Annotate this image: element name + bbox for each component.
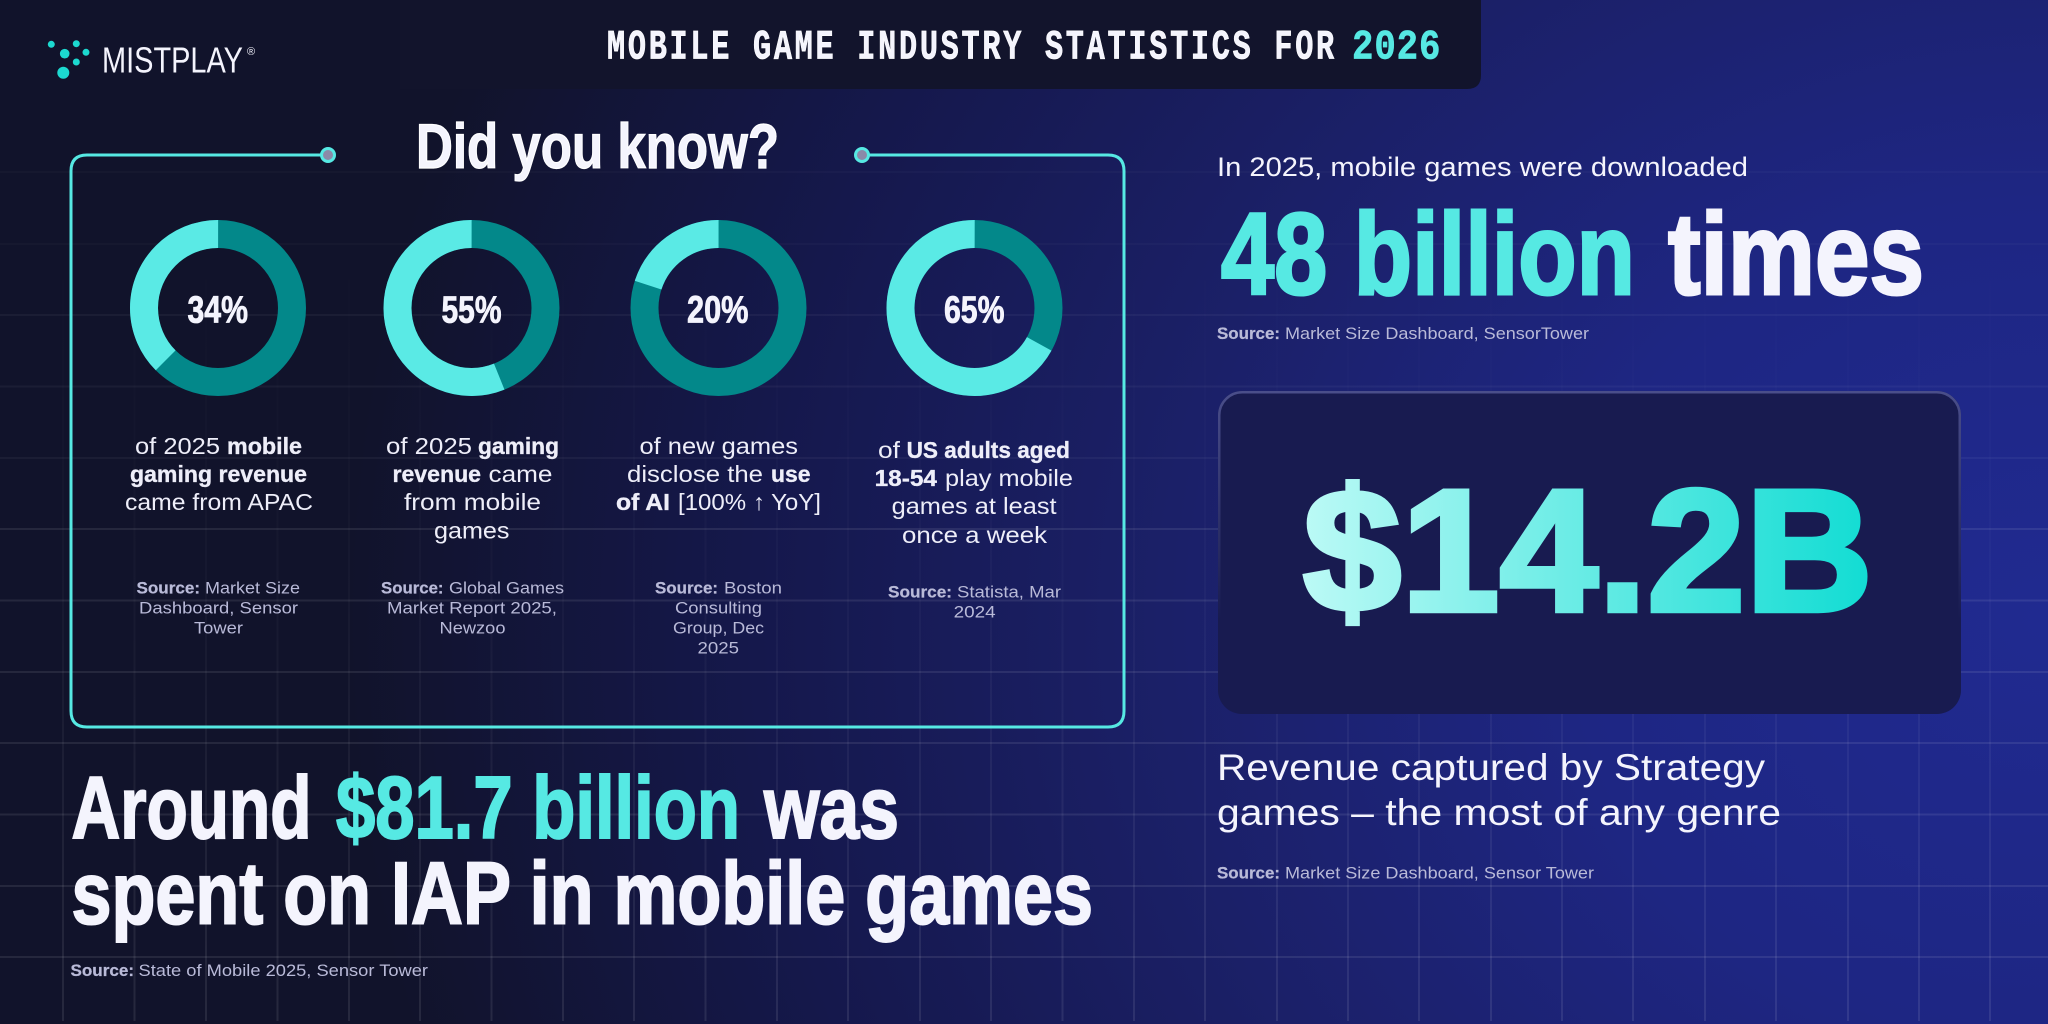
description: 20%: of AI <box>616 489 670 515</box>
stat column: 65% US adults <box>874 207 1075 622</box>
description: 20%: of new games <box>640 433 798 459</box>
donut chart: 55% <box>375 212 568 404</box>
description: 20%: [100% ↑ YoY] <box>678 489 821 515</box>
description: 65%: US adults aged <box>907 437 1070 463</box>
description: 65% <box>875 437 1073 548</box>
description: 34%: of 2025 <box>135 433 220 459</box>
stat column: 55% gaming revenue <box>375 212 568 638</box>
source: 55%: Market Report 2025, <box>387 600 557 618</box>
description: 55%: of 2025 <box>386 433 472 459</box>
source: 34%: Dashboard, Sensor <box>139 600 299 618</box>
text: strategy revenue caption: Revenue captured by Strategy <box>1217 747 1766 788</box>
source: 20%: Group, Dec <box>673 620 764 638</box>
source: 65%: Statista, Mar <box>957 584 1062 602</box>
source: 55%: Global Games <box>449 580 564 598</box>
description: 55%: from mobile <box>404 489 541 515</box>
title bar: 2026 <box>1352 24 1440 71</box>
donut chart: 65% <box>874 207 1075 409</box>
logo: Mistplay: MISTPLAY <box>102 39 243 80</box>
description: 55% <box>386 433 559 544</box>
logo: Mistplay: ® <box>247 46 255 58</box>
description: 65%: play mobile <box>945 465 1073 491</box>
text: strategy revenue caption: games – the most of any genre <box>1217 792 1781 833</box>
description: 34%: gaming revenue <box>130 461 307 487</box>
headline: $81.7 billion IAP spend <box>72 758 1093 943</box>
title text: MOBILE GAME INDUSTRY STATISTICS FOR <box>607 24 1334 71</box>
source: 34% <box>136 580 300 638</box>
source: downloads: Market Size Dashboard, SensorTower <box>1285 325 1590 343</box>
big number: $14.2B: $14.2B <box>1303 453 1873 648</box>
panel: $14.2B callout card <box>1218 391 1961 714</box>
donut chart: 65%: 65% <box>944 290 1004 332</box>
source: 65% <box>888 584 1062 622</box>
headline: $81.7 billion IAP spend: spent on IAP in mobile games <box>72 844 1093 943</box>
donut chart: 34% <box>113 203 323 413</box>
description: 20%: disclose the <box>627 461 763 487</box>
description: 55%: revenue <box>392 461 481 487</box>
source: 20%: Source: <box>655 580 718 598</box>
source: 34%: Market Size <box>205 580 300 598</box>
description: 34%: mobile <box>227 433 302 459</box>
source: 34%: Source: <box>136 580 200 598</box>
source: 55%: Newzoo <box>440 620 506 638</box>
source: strategy revenue: Market Size Dashboard, Sensor Tower <box>1285 865 1595 883</box>
headline: $81.7 billion IAP spend: was <box>763 758 899 857</box>
source: IAP spend: Source: <box>70 962 134 980</box>
donut chart: 34%: 34% <box>188 290 248 332</box>
description: 65%: games at least <box>892 493 1057 519</box>
stat column: 34% APAC revenue <box>113 203 323 638</box>
source: 20%: 2025 <box>698 640 739 658</box>
text: downloads intro: In 2025, mobile games were downloaded <box>1217 152 1748 182</box>
description: 34% <box>125 433 313 515</box>
source: 65%: Source: <box>888 584 952 602</box>
source: downloads: Source: <box>1217 325 1280 343</box>
stat column: 20% use of AI <box>616 215 821 658</box>
description: 20%: use <box>771 461 810 487</box>
description: 65%: of <box>878 437 901 463</box>
title bar <box>400 0 1481 89</box>
description: 55%: gaming <box>478 433 559 459</box>
headline: 48 billion times: times <box>1668 189 1924 319</box>
source: 20%: Boston <box>724 580 782 598</box>
headline: $81.7 billion IAP spend: Around <box>72 758 312 857</box>
source: IAP spend: State of Mobile 2025, Sensor Tower <box>138 962 429 980</box>
headline: 48 billion times: 48 billion <box>1221 189 1635 319</box>
source: 55%: Source: <box>381 580 444 598</box>
description: 20% <box>616 433 821 515</box>
description: 65%: 18-54 <box>875 465 937 491</box>
description: 65%: once a week <box>902 522 1048 548</box>
donut chart: 20% <box>625 215 812 401</box>
source: 55% <box>381 580 564 638</box>
donut chart: 55%: 55% <box>442 290 502 332</box>
description: 55%: came <box>488 461 552 487</box>
source: 20% <box>655 580 782 658</box>
text: strategy revenue caption <box>1217 747 1781 833</box>
source: 65%: 2024 <box>954 604 996 622</box>
panel: did you know frame <box>71 148 1124 727</box>
logo: Mistplay <box>48 39 255 80</box>
headline: $81.7 billion IAP spend: $81.7 billion <box>336 758 740 857</box>
description: 34%: came from APAC <box>125 489 313 515</box>
source: 20%: Consulting <box>675 600 762 618</box>
source: 34%: Tower <box>194 620 244 638</box>
heading: Did you know?: Did you know? <box>416 112 779 182</box>
donut chart: 20%: 20% <box>687 290 748 332</box>
description: 55%: games <box>434 518 510 544</box>
source: strategy revenue: Source: <box>1217 865 1280 883</box>
